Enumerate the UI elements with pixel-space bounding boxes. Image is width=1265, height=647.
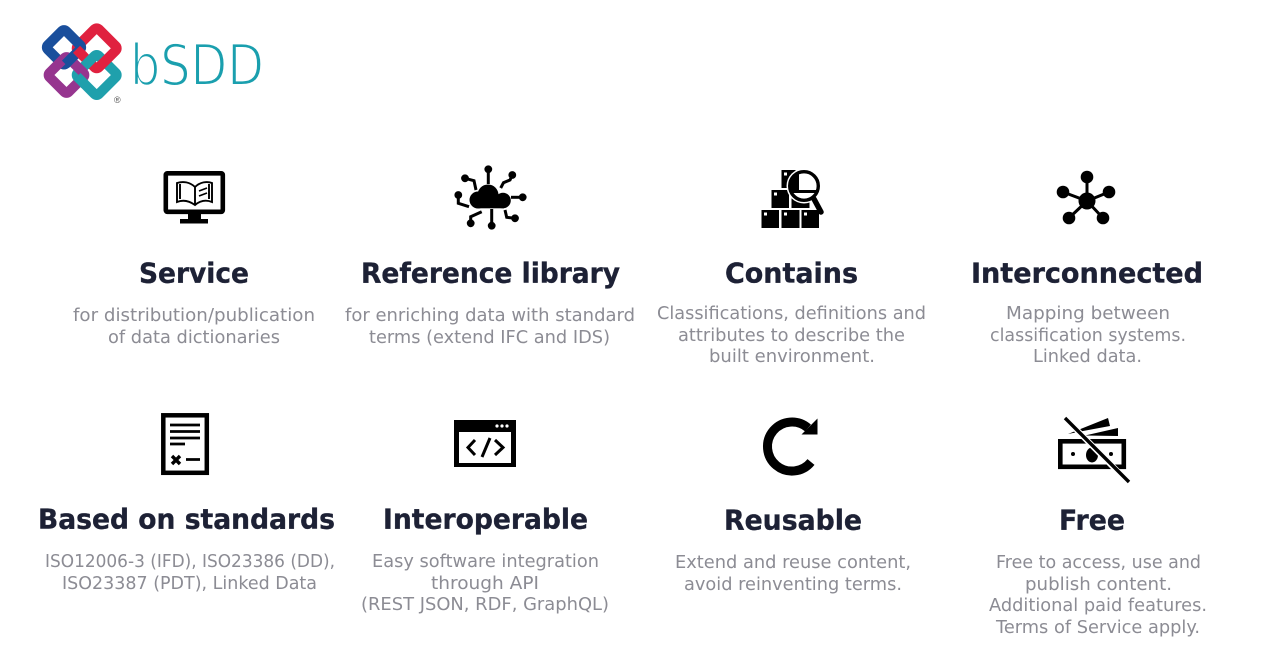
description [345, 305, 635, 348]
description: Mapping between [1006, 303, 1170, 324]
description [989, 552, 1207, 638]
description: Linked data. [1033, 346, 1142, 367]
description: attributes to describe the [678, 325, 905, 346]
heading: Free [1059, 504, 1125, 536]
heading: Reusable [724, 504, 862, 536]
description [73, 305, 315, 348]
description: ISO12006-3 (IFD), ISO23386 (DD), [45, 551, 335, 572]
panel: free [989, 418, 1207, 638]
description [657, 303, 926, 367]
registered mark: ® [114, 95, 121, 105]
icon: boxes with magnifier [762, 168, 822, 228]
icon: network hub [1057, 171, 1115, 224]
description [361, 551, 609, 615]
heading: Service [139, 256, 249, 290]
description: Terms of Service apply. [995, 617, 1200, 638]
panel: reference library [345, 165, 635, 348]
description: publish content. [1025, 574, 1172, 595]
description: through API [431, 573, 539, 594]
icon: cloud network [454, 165, 527, 230]
description: Extend and reuse content, [675, 552, 911, 573]
heading: Interconnected [971, 256, 1203, 290]
heading: Reference library [361, 256, 620, 290]
description: built environment. [709, 346, 875, 367]
description: Classifications, definitions and [657, 303, 926, 324]
panel: based on standards [38, 415, 335, 594]
description: Additional paid features. [989, 595, 1207, 616]
icon: crossed-out money [1060, 418, 1129, 482]
description: for distribution/publication [73, 305, 315, 326]
description [45, 551, 335, 594]
description: avoid reinventing terms. [684, 574, 902, 595]
description: Easy software integration [372, 551, 599, 572]
heading: Contains [725, 256, 858, 290]
description: terms (extend IFC and IDS) [369, 327, 610, 348]
logo mark: interlaced diamonds [46, 27, 118, 96]
heading: Interoperable [383, 502, 588, 536]
logo: bSDD [46, 27, 264, 105]
description: for enriching data with standard [345, 305, 635, 326]
description: of data dictionaries [108, 327, 280, 348]
description: classification systems. [990, 325, 1186, 346]
icon: document [163, 415, 207, 473]
panel: interconnected [971, 171, 1203, 367]
panel: reusable [675, 418, 911, 595]
panel: service [73, 173, 315, 348]
icon: reload arrow [767, 418, 818, 471]
panel: interoperable [361, 420, 609, 615]
heading: Based on standards [38, 502, 335, 536]
icon: code window [454, 420, 516, 467]
description [990, 303, 1186, 367]
description: ISO23387 (PDT), Linked Data [62, 573, 317, 594]
logo wordmark: bSDD [130, 33, 264, 99]
description [675, 552, 911, 595]
icon: monitor with book [166, 173, 223, 224]
description: (REST JSON, RDF, GraphQL) [361, 594, 609, 615]
description: Free to access, use and [996, 552, 1201, 573]
panel: contains [657, 168, 926, 367]
